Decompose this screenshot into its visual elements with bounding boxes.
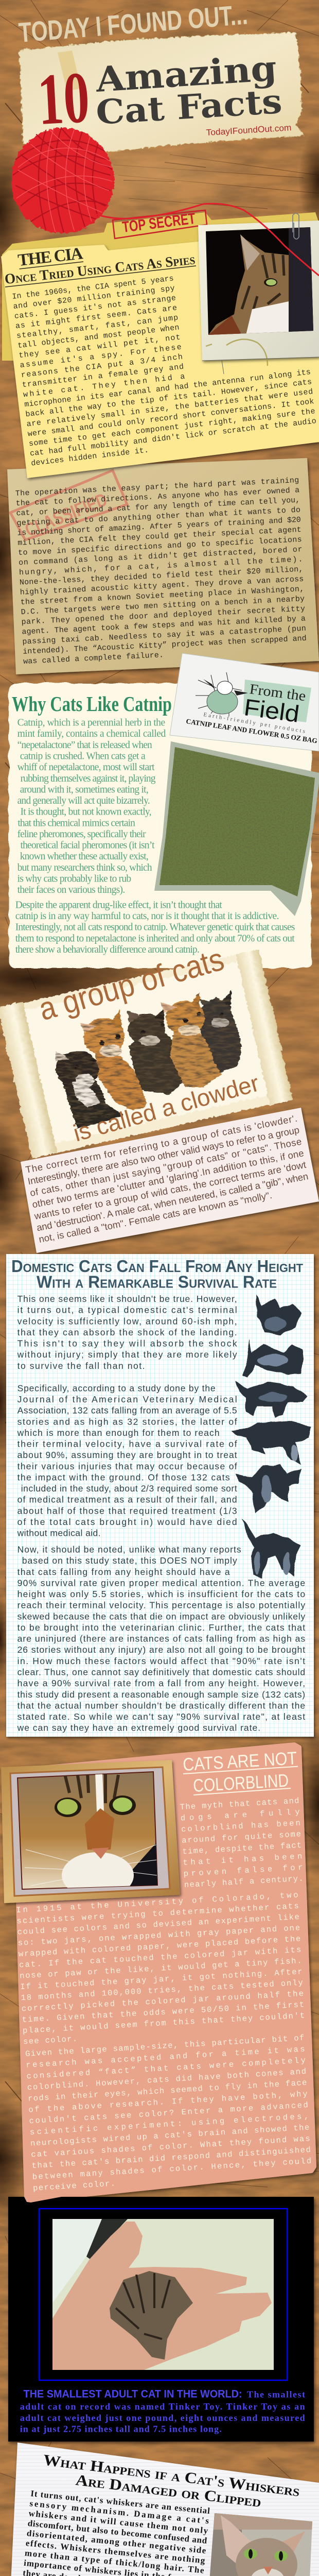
text block: catnip body: around with it, sometimes eating it, [20, 784, 149, 795]
text block: training the cat: D.C. The targets were two men sitting on a bench in a nearby [21, 595, 305, 617]
text block: colorblind myth: proven false for [183, 1863, 303, 1878]
text block: colorblind myth: The myth that cats and [180, 1796, 299, 1812]
text block: neurologist experiment: neurologists wired up a cat's brain and showed the [30, 2123, 310, 2148]
text block: spy cats: stealthy, smart, fast, can jump [16, 313, 179, 341]
text block: catnip body: there show a behaviorally difference around catnip. [15, 944, 200, 955]
text block: falling survival rate: clear. Thus, one cannot say definitively that domestic cats should [17, 1667, 305, 1677]
text block: training the cat: passing taxi cab. Needless to say it was a catastrophe (pun [22, 624, 306, 647]
text block: falling survival rate: Now, it should be noted, unlike what many reports [17, 1545, 241, 1555]
text block: 1915 experiment: nose or paw or the like, it would get a tiny fish. [20, 1956, 302, 1981]
text block: spy cats: reasons the CIA put a 3/4 inch [21, 353, 183, 380]
text block: training the cat: hungry, which, for a cat, is almost all the time). [19, 555, 303, 577]
text block: falling survival rate: This isn't to say they will absorb the shock [17, 1338, 237, 1349]
text block: falling survival rate: without injury; simply that they are more likely [17, 1349, 237, 1360]
text block: falling survival rate: height was only 5.5 stories, which is insufficient for the cats to [17, 1589, 305, 1599]
text block: sensory mechanism: It turns out, cat's whiskers are an essential [30, 2488, 210, 2516]
text block: falling survival rate: reach their terminal velocity. This percentage is also potentially [17, 1600, 305, 1611]
photo: five kittens [56, 990, 241, 1128]
text block: training the cat: None-the-less, they decided to field test their $20 million, [20, 565, 304, 587]
text block: falling survival rate: which is more than enough for them to reach [17, 1428, 220, 1438]
heading: whiskers [42, 2451, 300, 2511]
text block: training the cat: The operation was the easy part; the hard part was training [15, 476, 299, 498]
panel: clowder explanation note: other two terms are 'clutter and 'glaring'.In addition to this, if one [31, 1147, 305, 1210]
text block: 1915 experiment: In 1915 at the University of Colorado, two [16, 1890, 298, 1915]
text block: falling survival rate: that the actual number shouldn't be drastically different than the [17, 1700, 305, 1710]
text block: colorblind myth: dogs are fully [180, 1807, 300, 1823]
text block: neurologist experiment: cat various shades of color. What they found was [31, 2134, 310, 2159]
text block: training the cat: to move in specific directions and go to specific locations [18, 535, 302, 557]
text block: training the cat: the cat to follow directions. As anyone who has ever owned a [15, 486, 300, 508]
text block: falling survival rate: 90% survival rate given proper medical attention. The average [17, 1578, 305, 1588]
caption: Tinker Toy [20, 2388, 305, 2434]
text block: catnip body: feline pheromones, specifically their [17, 829, 146, 840]
panel: whiskers paper [0, 2443, 319, 2576]
text block: falling survival rate: Association, 132 cats falling from an average of 5.5 [17, 1405, 237, 1416]
logo: From the Field: Field [242, 693, 301, 727]
caption: Tinker Toy: THE SMALLEST ADULT CAT IN THE WORLD: [24, 2388, 242, 2400]
text block: colorblind myth: time, despite the fact [182, 1841, 302, 1856]
text block: falling survival rate: stories and as high as 32 stories, the latter of [17, 1416, 237, 1427]
heading: catnip: Why Cats Like Catnip [12, 692, 172, 716]
text block: falling survival rate: that they can absorb the shock of the landing. [17, 1327, 237, 1337]
text block: neurologist experiment: research was accepted and for a time it was [26, 2044, 305, 2070]
panel: classified memo paper [7, 458, 319, 674]
text block: neurologist experiment [25, 2033, 319, 2193]
heading: whiskers: What Happens if a Cat's Whiskers [42, 2451, 300, 2500]
panel: clowder explanation note: and 'destruction'. A male cat, when neutered, is called a "gib", when [36, 1171, 309, 1233]
text block: neurologist experiment: colorblind. However, cats did have both cones and [27, 2067, 307, 2092]
text block: falling survival rate: are uninjured (there are instances of cats falling from as high as [17, 1634, 305, 1644]
text block: 1915 experiment: If it touched the gray jar, it got nothing. After [20, 1967, 303, 1992]
photo: hairless cat [210, 2513, 312, 2576]
panel: falling cats graph paper [6, 1254, 314, 1737]
text block: spy cats: devices hidden inside it. [30, 446, 149, 468]
salmon panel corner overlap [24, 2196, 67, 2202]
panel: scroll about a clowder [0, 941, 292, 1159]
title line: Amazing: Amazing [94, 47, 278, 100]
caption: Tinker Toy: in at just 2.75 inches tall and 7.5 inches long. [20, 2424, 222, 2434]
panel: clowder explanation note: of cats, other than just saying "group of cats" or "cats". Those [29, 1136, 303, 1198]
text block: 1915 experiment: scientists were trying to determine whether cats [16, 1902, 299, 1926]
text block: neurologist experiment: perceive color. [33, 2179, 115, 2193]
text block: training the cat: is nothing short of amazing. After 5 years of training and $20 [17, 516, 301, 538]
logo: From the Field: From the [249, 681, 307, 704]
text block: neurologist experiment: Given the large sample-size, this particular bit of [25, 2033, 305, 2059]
text block: 1915 experiment: cat. If the cat touched the colored jar with its [19, 1945, 302, 1970]
photo: catnip bag [154, 653, 319, 916]
text block: sensory mechanism: sensory mechanism. Damage a cat's [29, 2498, 209, 2526]
text block: 1915 experiment: place, it would seem from this that they couldn't [23, 2011, 305, 2036]
heading: domestic cats can fall: With a Remarkable Survival Rate [37, 1273, 277, 1291]
text block: spy cats: microphone in its ear canal and had the antenna run along its [24, 368, 311, 409]
text block: sensory mechanism [19, 2488, 214, 2576]
text block: training the cat: the street from a known Soviet meeting place in Washington, [20, 585, 305, 607]
illustration: sequence of a falling cat [231, 1294, 311, 1578]
text block: falling survival rate: about 90%, assuming they are brought in to treat [17, 1450, 237, 1460]
heading: the CIA: Once Tried Using Cats As Spies [4, 251, 196, 287]
text block: spy cats: were small and could only record short conversations. It took [27, 397, 314, 438]
text block: training the cat: was called a complete failure. [23, 651, 164, 666]
text block: spy cats: white cat. They then hid a [23, 372, 185, 399]
panel: the smallest adult cat [8, 2196, 314, 2442]
text block: falling survival rate: their various injuries that may occur because of [17, 1461, 237, 1471]
text block: spy cats: they see a cat will pet it, not [19, 333, 181, 360]
heading: a group of cats: a group of cats [35, 941, 228, 1027]
heading: domestic cats can fall: Domestic Cats Can Fall From Any Height [11, 1257, 303, 1276]
text block: training the cat [15, 476, 313, 666]
text block: training the cat: cat, or been around a cat for any length of time can tell you, [16, 496, 300, 518]
text block: falling survival rate: it turns out, a typical domestic cat's terminal [17, 1305, 237, 1315]
text block: colorblind myth: nearly half a century. [184, 1874, 304, 1890]
text block: neurologist experiment: scientific experiment: using electrodes, [29, 2112, 309, 2137]
text block: catnip body: theoretical facial pheromones (it isn’t [21, 840, 155, 851]
text block: falling survival rate: have a 90% survival rate from a fall from any height. However, [17, 1678, 305, 1688]
text block: falling survival rate: velocity is sufficiently low, around 60-ish mph, [17, 1316, 237, 1326]
icon: paperclip [293, 213, 299, 239]
text block: sensory mechanism: disorientated, among other negative side [26, 2528, 207, 2555]
text block: sensory mechanism: effects. Whiskers themselves are nothing [25, 2538, 206, 2565]
text block: training the cat: intended). The “Acoustic Kitty” project was then scrapped and [23, 634, 307, 656]
text block: sensory mechanism: more than a type of thick/long hair. The [24, 2548, 205, 2575]
thread of yarn [96, 204, 319, 276]
heading: cats are not colorblind: CATS ARE NOT [182, 1748, 297, 1775]
text block: falling survival rate: of the total cats brought in) would have died [17, 1517, 237, 1527]
text block: training the cat: on command (as long as it didn't get distracted, bored or [19, 545, 303, 567]
text block: colorblind myth: colorblind has been [181, 1819, 300, 1834]
text block: falling survival rate: included in the study, about 2/3 required some sort [21, 1483, 237, 1494]
text block: falling survival rate: we can say they have an extremely good survival rate. [17, 1723, 260, 1733]
text block: neurologist experiment: that the cat's brain did respond and distinguished [31, 2145, 311, 2171]
heading: whiskers: Are Damaged or Clipped [75, 2471, 262, 2511]
text block: spy cats: back all the way to the tip of its tail. However, since cats [25, 378, 312, 419]
logo: From the Field [186, 672, 318, 745]
text block: falling survival rate: that cats falling from any height should have a [17, 1567, 230, 1577]
text block: colorblind myth: that it has been [183, 1852, 303, 1868]
photo: polaroid of a tabby cat [198, 221, 319, 374]
text block: falling survival rate: based on this study state, this DOES NOT imply [22, 1555, 237, 1566]
logo: From the Field: Earth-friendly pet products [203, 711, 306, 735]
text block: 1915 experiment: time. Given that the odds were 50/50 in the first [22, 2000, 305, 2025]
caption: Tinker Toy: adult cat on record was named Tinker Toy. Tinker Toy as an [20, 2401, 305, 2412]
text block: falling survival rate: to be brought into the veterinarian clinic. Further, the cats that [17, 1622, 305, 1633]
text block: spy cats: are relatively small in size, the batteries that were used [26, 387, 313, 429]
text block: 1915 experiment: wrapped with colored paper, were placed before the [19, 1934, 301, 1959]
logo: From the Field: CATNIP LEAF AND FLOWER 0.5 OZ BAG [186, 717, 318, 745]
text block: catnip body: their faces on various things). [17, 885, 125, 895]
text block: falling survival rate: without medical aid. [17, 1528, 101, 1538]
text block: falling survival rate: about half of those that required treatment (1/3 [17, 1505, 237, 1516]
text block: catnip body: whiff of nepetalactone, most will start [17, 762, 155, 773]
text block: neurologist experiment: between many shades of color. Hence, they could [32, 2157, 312, 2182]
text block: 1915 experiment: see color. [23, 2035, 78, 2046]
photo: tiny kitten on a hand [52, 2219, 274, 2370]
text block: spy cats: cats. I guess it's not as strange [14, 294, 176, 321]
text block: 1915 experiment: so: two jars, one wrapped with gray paper and one [17, 1923, 300, 1948]
text block: falling survival rate: skewed because the cats that die on impact are obviously unlikely [17, 1611, 305, 1621]
text block: catnip body: Despite the apparent drug-like effect, it isn’t thought that [15, 900, 222, 910]
panel: clowder explanation note: not, is called a "tom". Female cats are known as "molly". [38, 1190, 273, 1245]
text block: neurologist experiment: of the above research. If they have both, why [28, 2089, 308, 2115]
stamp: classified: CLASSIFIED [22, 488, 110, 540]
text block: falling survival rate: in. How much these factors would affect that "90%" rate isn't [17, 1656, 305, 1666]
panel: title torn paper [19, 31, 303, 150]
text block: catnip body: them to respond to nepetalactone is inherited and only about 70% of cats out [15, 933, 295, 944]
text block: training the cat: getting a cat to do anything other than what it wants to do [16, 506, 300, 528]
text block: catnip body: It is thought, but not known exactly, [21, 807, 151, 818]
text block: sensory mechanism: discomfort, but also to become confused and [27, 2518, 208, 2546]
text block: catnip body: known whether these actually exist, [20, 851, 149, 862]
text block: spy cats: some time to get each component just right, making sure the [28, 407, 315, 448]
panel: top secret folder [1, 210, 319, 478]
text block: falling survival rate: This one seems like it shouldn't be true. However, [17, 1294, 237, 1304]
caption: Tinker Toy: The smallest [247, 2389, 305, 2400]
text block: catnip body: but many researchers think so, which [17, 862, 152, 873]
heading: domestic cats can fall [11, 1257, 303, 1291]
text block: falling survival rate: their terminal velocity, have a survival rate of [17, 1439, 237, 1449]
heading: the CIA: THE CIA [17, 244, 84, 270]
text block: falling survival rate: Specifically, according to a study done by the [17, 1383, 216, 1393]
text block: falling survival rate: stated rate. So while we can't say "90% survival rate", at least [17, 1711, 305, 1722]
panel: clowder explanation note: The correct term for referring to a group of cats is 'clowder'. [25, 1113, 298, 1175]
panel: clowder explanation note: Interestingly, there are also two other valid ways to refer to a group [27, 1124, 300, 1187]
panel: clowder explanation note [21, 1108, 319, 1253]
coffee ring stain [206, 340, 268, 366]
text block: spy cats: In the 1960s, the CIA spent 5 years [12, 274, 174, 301]
text block: colorblind myth: around for quite some [182, 1829, 301, 1845]
text block: catnip body: that this chemical mimics certain [17, 818, 135, 828]
text block: colorblind myth [180, 1796, 312, 1890]
text block: spy cats: as it might first seem. Cats are [15, 303, 178, 331]
text block: spy cats: tall objects, and most people when [17, 323, 180, 350]
text block: 1915 experiment: could see colors and so devised an experiment like [17, 1912, 299, 1937]
site name: TodayIFoundOut.com [206, 123, 292, 138]
text block: catnip body: rubbing themselves against it, playing [21, 773, 156, 784]
text block: falling survival rate: this study did present a reasonable enough sample size (132 cats) [17, 1689, 305, 1700]
stamp: top secret [113, 210, 207, 239]
text block: spy cats: transmitter in a female grey and [22, 363, 184, 389]
text block: catnip body: catnip is crushed. When cats get a [20, 751, 146, 761]
heading: cats are not colorblind [182, 1748, 298, 1796]
text block: training the cat: agent. The agent took a few steps and was hit and killed by a [22, 615, 306, 636]
text block: falling survival rate: Journal of the American Veterinary Medical [17, 1394, 237, 1404]
heading: is called a clowder: is called a clowder [70, 1070, 262, 1147]
text block: sensory mechanism: whiskers and it will cause them not only [28, 2509, 209, 2536]
text block: catnip body: “nepetalactone” that is released when [17, 740, 152, 751]
text block: training the cat: highly trained acoustic kitty agent. They drove a van across [20, 575, 304, 597]
title line: Cat Facts: Cat Facts [95, 82, 283, 132]
icon: red yarn ball [10, 126, 113, 234]
panel: clowder explanation note: wants to refer to a group of wild cats, the correct terms are 'dowt [33, 1159, 307, 1222]
panel: cats are not colorblind [15, 1745, 319, 2200]
text block: falling survival rate: 26 stories without any injury) are also not all going to be brought [17, 1645, 305, 1655]
text block: 1915 experiment: correctly picked the colored jar around half the [21, 1989, 304, 2013]
text block: spy cats [12, 260, 319, 468]
text block: falling survival rate: of medical treatment as a result of their fall, and [17, 1495, 237, 1505]
text block: spy cats: cat had full mobility and didn't lick or scratch at the audio [29, 417, 317, 458]
text block: training the cat: park. They opened the door and deployed their secret kitty [21, 604, 305, 626]
title number 10: 10 [36, 56, 91, 140]
photo: framed cat face [1, 1760, 180, 1903]
text block: training the cat: million, the CIA felt they could get their special cat agent [17, 526, 302, 548]
text block: spy cats: assume it's a spy. For these [20, 343, 182, 370]
panel: why cats like catnip [9, 683, 311, 968]
stamp: top secret: TOP SECRET [121, 210, 197, 236]
text block: 1915 experiment [16, 1890, 312, 2046]
text block: 1915 experiment: 18 months and 100,000 tries, the cats tested only [21, 1978, 303, 2003]
text block: catnip body: catnip is in any way harmful to cats, nor is it thought that it is addictive. [15, 911, 279, 922]
text block: neurologist experiment: rods in their eyes, which seemed to fly in the face [28, 2078, 307, 2104]
text block: catnip body: mint family, contains a chemical called [17, 728, 166, 739]
text block: falling survival rate: the impact with the ground. Of those 132 cats [17, 1472, 230, 1482]
text block: catnip body: is why cats probably like to rub [17, 873, 131, 884]
text block: catnip body: and generally will act quite bizarrely. [17, 795, 150, 806]
text block: catnip body: Interestingly, not all cats respond to catnip. Whatever genetic quirk that causes [15, 922, 295, 933]
text block: neurologist experiment: couldn't cats see color? Enter a more advanced [29, 2100, 308, 2126]
text block: spy cats: and over $20 million training spy [13, 284, 175, 311]
text block: neurologist experiment: considered “fact” that cats were completely [26, 2056, 306, 2081]
caption: Tinker Toy: adult cat weighed just one pound, eight ounces and measured [20, 2413, 305, 2423]
text block: falling survival rate: to survive the fall than not. [17, 1361, 145, 1371]
text block: catnip body: Catnip, which is a perennial herb in the [17, 718, 165, 728]
heading: cats are not colorblind: COLORBLIND [192, 1770, 289, 1796]
